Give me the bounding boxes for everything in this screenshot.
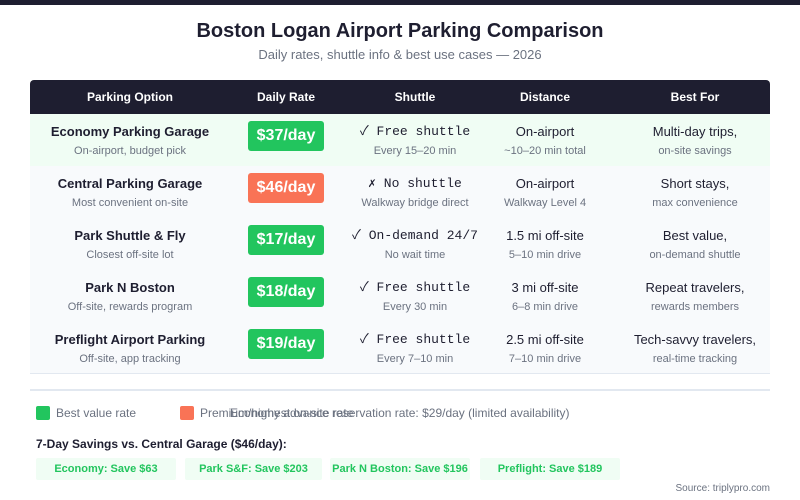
savings heading: 7-Day Savings vs. Central Garage ($46/day):	[36, 437, 287, 451]
row: Economy: Economy Parking Garage	[51, 124, 209, 139]
row: Economy: ~10–20 min total	[504, 145, 586, 157]
row: Park N Boston: 3 mi off-site	[512, 280, 578, 295]
savings pills	[36, 458, 620, 480]
row: Park Shuttle & Fly: 5–10 min drive	[509, 249, 581, 261]
row: Preflight: Tech-savvy travelers,	[634, 332, 756, 347]
title: Boston Logan Airport Parking Comparison	[196, 20, 604, 42]
row: Park N Boston: Park N Boston	[85, 280, 175, 295]
row: Park N Boston: 6–8 min drive	[512, 301, 578, 313]
row: Central: Short stays,	[661, 176, 729, 191]
row: Park Shuttle & Fly: Park Shuttle & Fly	[74, 228, 186, 243]
row: Preflight: $19/day	[257, 335, 315, 352]
row: Economy: Every 15–20 min	[374, 145, 456, 157]
row: Preflight: Off-site, app tracking	[79, 353, 181, 365]
row: Park N Boston: rewards members	[651, 301, 739, 313]
row: Preflight: ✓ Free shuttle	[360, 332, 470, 347]
row: Park Shuttle & Fly: on-demand shuttle	[649, 249, 741, 261]
row: Preflight: 2.5 mi off-site	[506, 332, 584, 347]
row: Economy: ✓ Free shuttle	[360, 124, 470, 139]
row: Preflight: Every 7–10 min	[377, 353, 453, 365]
row: Central: max convenience	[652, 197, 738, 209]
top bar	[0, 0, 800, 5]
row: Park Shuttle & Fly: Best value,	[663, 228, 727, 243]
row: Central	[30, 166, 770, 218]
legend	[36, 406, 570, 420]
table header	[30, 80, 770, 114]
row: Central: $46/day	[257, 179, 315, 196]
row: Park N Boston: $18/day	[257, 283, 315, 300]
row: Park Shuttle & Fly: 1.5 mi off-site	[506, 228, 584, 243]
row: Park Shuttle & Fly	[30, 218, 770, 270]
row: Park N Boston: Off-site, rewards program	[68, 301, 192, 313]
row: Preflight: 7–10 min drive	[509, 353, 581, 365]
savings pills: Preflight: Save $189	[498, 463, 602, 475]
savings pills: Park N Boston: Save $196	[332, 463, 468, 475]
row: Park Shuttle & Fly: No wait time	[385, 249, 445, 261]
row: Preflight: Preflight Airport Parking	[55, 332, 205, 347]
legend: Premium/highest on-site rate	[200, 406, 353, 420]
row: Economy: On-airport, budget pick	[74, 145, 186, 157]
subtitle: Daily rates, shuttle info & best use cases — 2026	[258, 47, 542, 62]
table header: Best For	[671, 90, 719, 104]
row: Park N Boston	[30, 270, 770, 322]
table header: Shuttle	[395, 90, 435, 104]
row: Economy: Multi-day trips,	[653, 124, 737, 139]
row: Preflight: real-time tracking	[653, 353, 737, 365]
row: Park Shuttle & Fly: $17/day	[257, 231, 315, 248]
row: Central: Most convenient on-site	[72, 197, 188, 209]
table	[30, 80, 770, 374]
row: Central: Walkway Level 4	[504, 197, 586, 209]
row: Park N Boston: ✓ Free shuttle	[360, 280, 470, 295]
row: Park Shuttle & Fly: Closest off-site lot	[86, 249, 174, 261]
row: Preflight	[30, 322, 770, 374]
row: Central: On-airport	[516, 176, 574, 191]
row: Central: ✗ No shuttle	[368, 176, 462, 191]
savings pills: Park S&F: Save $203	[199, 463, 308, 475]
row: Central: Walkway bridge direct	[361, 197, 469, 209]
legend: Best value rate	[56, 406, 136, 420]
row: Economy: on-site savings	[658, 145, 732, 157]
legend: Economy advance reservation rate: $29/day (limited availability)	[230, 406, 570, 420]
table header: Daily Rate	[257, 90, 315, 104]
source: Source: triplypro.com	[676, 483, 770, 494]
row: Economy: On-airport	[516, 124, 574, 139]
savings pills: Economy: Save $63	[54, 463, 158, 475]
row: Park N Boston: Every 30 min	[383, 301, 447, 313]
row: Economy	[30, 114, 770, 166]
row: Central: Central Parking Garage	[58, 176, 202, 191]
table header: Parking Option	[87, 90, 173, 104]
table header: Distance	[520, 90, 570, 104]
row: Economy: $37/day	[257, 127, 315, 144]
row: Park Shuttle & Fly: ✓ On-demand 24/7	[352, 228, 478, 243]
row: Park N Boston: Repeat travelers,	[646, 280, 744, 295]
